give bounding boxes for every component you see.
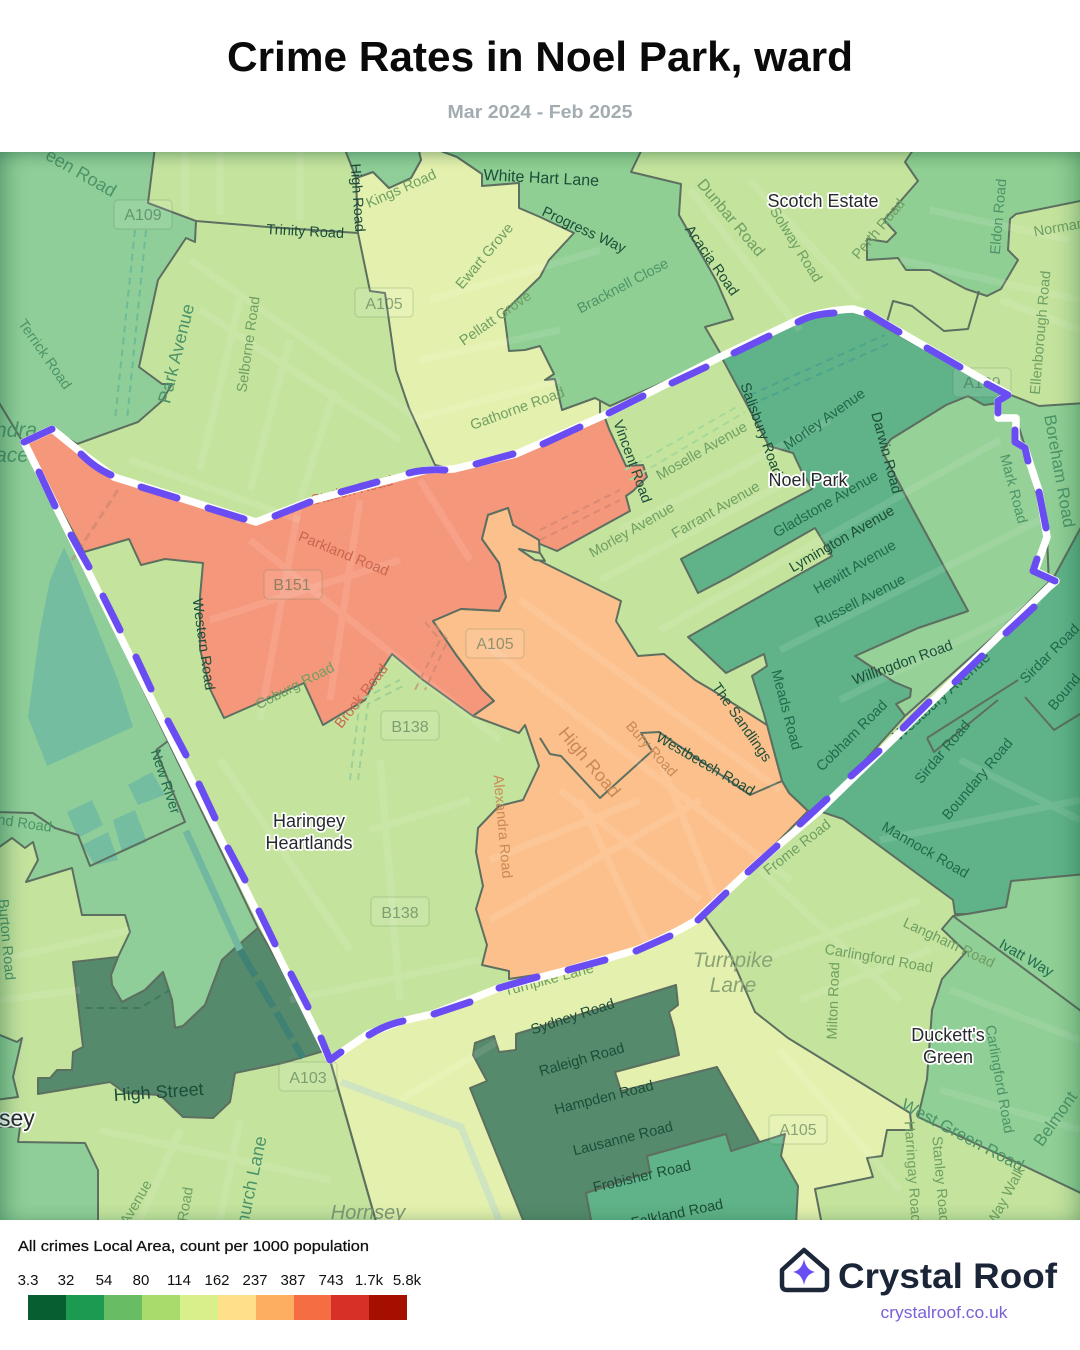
street labels: High Road <box>555 723 625 801</box>
street labels: High Road <box>347 163 367 232</box>
street labels: Lausanne Road <box>571 1119 675 1159</box>
street labels: White Hart Lane <box>483 167 600 190</box>
street labels: Carlingford Road <box>823 942 934 976</box>
street labels: Lane <box>710 974 756 997</box>
shield: A103 <box>279 1062 337 1091</box>
legend scale numbers: 32 <box>58 1272 74 1289</box>
region: small mid green patch <box>344 147 421 188</box>
page white footer band <box>0 1220 1080 1350</box>
region: south-east teal green <box>819 520 1080 914</box>
shield: A109 <box>114 200 172 229</box>
street labels: Ivatt Way <box>996 937 1057 981</box>
dashed paths: New River and walkways <box>85 230 890 1008</box>
street labels: Perth Road <box>849 196 909 263</box>
street labels: Milton Road <box>825 962 843 1040</box>
shield: A103: A103 <box>289 1070 327 1087</box>
street labels: Boreham Road <box>1040 413 1079 529</box>
shield: A109 east: A109 <box>963 375 1001 392</box>
street labels: Lymington Avenue <box>787 503 897 576</box>
legend scale numbers: 162 <box>204 1272 230 1289</box>
street labels: Bury Road <box>622 719 680 780</box>
street labels: Western Road <box>189 598 217 691</box>
shield: B138 south <box>371 897 429 926</box>
street labels: Russell Avenue <box>812 572 908 631</box>
street labels: Trinity Road <box>266 222 344 242</box>
street labels: Belmont <box>1030 1088 1080 1150</box>
street labels: Park Avenue <box>154 302 198 405</box>
street labels: Meads Road <box>767 668 804 752</box>
street labels: Moselle Avenue <box>654 419 750 484</box>
region: Mark Road mid green <box>855 396 1049 716</box>
shield: A109: A109 <box>124 207 162 224</box>
shield: B138 north: B138 <box>391 719 429 736</box>
place labels: Noel Park <box>768 470 849 490</box>
street labels: Hewitt Avenue <box>811 537 899 598</box>
map edge shadow <box>0 152 1080 1220</box>
street labels: Turnpike Lane <box>502 960 596 1000</box>
legend scale numbers: 387 <box>280 1272 306 1289</box>
street labels: Mark Road <box>996 453 1030 525</box>
road shields <box>114 200 1011 1144</box>
street labels: Sydney Road <box>529 996 617 1038</box>
region: bottom-left mid green patches <box>0 1033 98 1225</box>
street labels: Hampden Road <box>553 1078 655 1118</box>
place labels: Duckett's <box>911 1025 985 1045</box>
legend scale numbers: 237 <box>242 1272 268 1289</box>
legend colour bar <box>28 1295 407 1320</box>
page white header band <box>0 0 1080 152</box>
region: sliver near Vincent Road <box>519 549 545 561</box>
street labels: Vincent Road <box>609 418 654 505</box>
place labels: Scotch Estate <box>767 191 879 211</box>
legend scale numbers: 3.3 <box>18 1272 38 1289</box>
street labels: Carlingford Road <box>982 1024 1016 1135</box>
region: pale yellow south <box>330 917 912 1225</box>
railway lines <box>72 490 499 1220</box>
street labels: Westbury Avenue <box>890 649 994 745</box>
street labels: Hornsey <box>331 1202 406 1224</box>
legend scale numbers: 1.7k <box>355 1272 384 1289</box>
legend scale numbers: 743 <box>318 1272 344 1289</box>
street labels: Way Walk <box>984 1163 1029 1228</box>
region: pale yellow north <box>356 147 600 469</box>
map base: light green area <box>0 152 1080 1220</box>
logo url: crystalroof.co.uk <box>880 1304 1008 1322</box>
region: Boreham Road mid green <box>998 394 1080 587</box>
shield: B138 north <box>381 711 439 740</box>
street labels: Westbeech Road <box>653 730 757 799</box>
street labels: Ellenborough Road <box>1028 270 1054 395</box>
street labels: Alexandra Road <box>489 774 514 879</box>
region: Duckett's Green mid green <box>918 874 1080 1195</box>
boundary lines <box>0 203 1080 1225</box>
shield: A105 south: A105 <box>779 1122 817 1139</box>
street labels: Brook Road <box>332 661 392 732</box>
street labels: Salisbury Road <box>736 381 785 479</box>
street labels: Willingdon Road <box>850 638 955 689</box>
street labels: Morley Avenue <box>587 500 677 561</box>
street labels: Boundary Road <box>939 736 1016 823</box>
street labels: Raleigh Road <box>537 1040 626 1080</box>
region: orange ward area, High Road <box>433 508 808 979</box>
street labels: Terrick Road <box>14 317 74 393</box>
street labels: Bracknell Close <box>575 256 671 317</box>
street labels: Morley Avenue <box>781 386 868 454</box>
street labels: High Street <box>113 1079 204 1105</box>
region: Falkland Road teal green <box>586 1134 798 1225</box>
region: Raleigh Road dark green <box>470 985 760 1225</box>
street labels: Parkland Road <box>296 529 391 580</box>
shield: B138 south: B138 <box>381 905 419 922</box>
logo icon: house with star <box>782 1250 827 1290</box>
street labels: Gladstone Avenue <box>771 468 881 541</box>
legend scale numbers: 114 <box>167 1272 191 1289</box>
street labels: Mannock Road <box>879 819 971 882</box>
legend scale numbers: 80 <box>133 1272 149 1289</box>
street labels: Harringay Road <box>900 1121 924 1223</box>
place labels: Heartlands <box>265 833 353 853</box>
street labels: Falkland Road <box>630 1197 725 1232</box>
shield: A105 centre <box>466 629 524 658</box>
road network texture <box>0 152 1080 1220</box>
legend scale numbers: 54 <box>96 1272 112 1289</box>
shield: A109 east <box>953 368 1011 397</box>
legend scale numbers: 5.8k <box>393 1272 422 1289</box>
ward boundary purple dashes <box>24 313 1055 1060</box>
street labels: Darwin Road <box>867 410 904 496</box>
street labels: Frobisher Road <box>592 1158 693 1196</box>
region: Bracknell Close mid green <box>430 147 733 410</box>
street labels: The Sandlings <box>708 680 774 765</box>
legend title: All crimes Local Area, count per 1000 population <box>18 1239 369 1255</box>
street labels: Langham Road <box>900 915 997 972</box>
street labels: Acacia Road <box>681 222 741 299</box>
shield: B151: B151 <box>273 577 311 594</box>
street labels: een Road <box>42 145 120 201</box>
street labels: Cobham Road <box>813 697 891 775</box>
region: High Street dark green <box>38 928 327 1118</box>
street labels: Stanley Road <box>928 1136 952 1224</box>
street labels: Solway Road <box>766 204 825 285</box>
street labels: Selborne Road <box>234 295 264 393</box>
shield: A105 centre: A105 <box>476 636 514 653</box>
place labels <box>0 191 985 1131</box>
region: north-east mid green <box>867 147 1080 296</box>
shield: B151 <box>264 570 322 599</box>
shield: A105 north <box>355 288 413 317</box>
street labels: Frome Road <box>761 817 834 879</box>
street labels: Eldon Road <box>988 178 1010 255</box>
title: Crime Rates in Noel Park, ward <box>227 33 853 80</box>
street labels: Gathorne Road <box>468 385 567 434</box>
street labels: Pellatt Grove <box>457 288 535 349</box>
street labels: Progress Way <box>539 204 629 257</box>
street labels: Avenue <box>117 1178 156 1228</box>
shield: A105 north: A105 <box>365 296 403 313</box>
region: reservoir lake <box>28 547 133 766</box>
ward boundary white line <box>24 309 1056 1060</box>
region: filter beds <box>67 772 165 865</box>
place labels: sey <box>0 1105 35 1131</box>
street labels: Dunbar Road <box>693 176 768 260</box>
legend scale numbers <box>18 1272 422 1289</box>
region: Noel Park teal green <box>681 309 1000 811</box>
street labels: Turnpike <box>693 949 773 972</box>
street labels: West Green Road <box>898 1095 1027 1175</box>
street labels: Sirdar Road <box>912 718 974 787</box>
street labels: Kings Road <box>364 167 439 212</box>
street labels: Ewart Grove <box>453 220 517 292</box>
street labels: Farrant Avenue <box>669 479 763 542</box>
street labels: Station Road <box>309 473 395 509</box>
place labels: Green <box>923 1047 973 1067</box>
street labels: Church Lane <box>230 1134 271 1239</box>
street labels: Coburg Road <box>253 660 337 713</box>
region: red ward area, Wood Green <box>24 418 647 725</box>
region: western mid green <box>0 147 258 1028</box>
street labels: Road <box>175 1186 197 1223</box>
logo wordmark: Crystal Roof <box>838 1257 1057 1296</box>
shield: A105 south <box>769 1115 827 1144</box>
street labels: New River <box>147 747 183 816</box>
place labels: Haringey <box>273 811 345 831</box>
subtitle: date range: Mar 2024 - Feb 2025 <box>448 101 632 122</box>
